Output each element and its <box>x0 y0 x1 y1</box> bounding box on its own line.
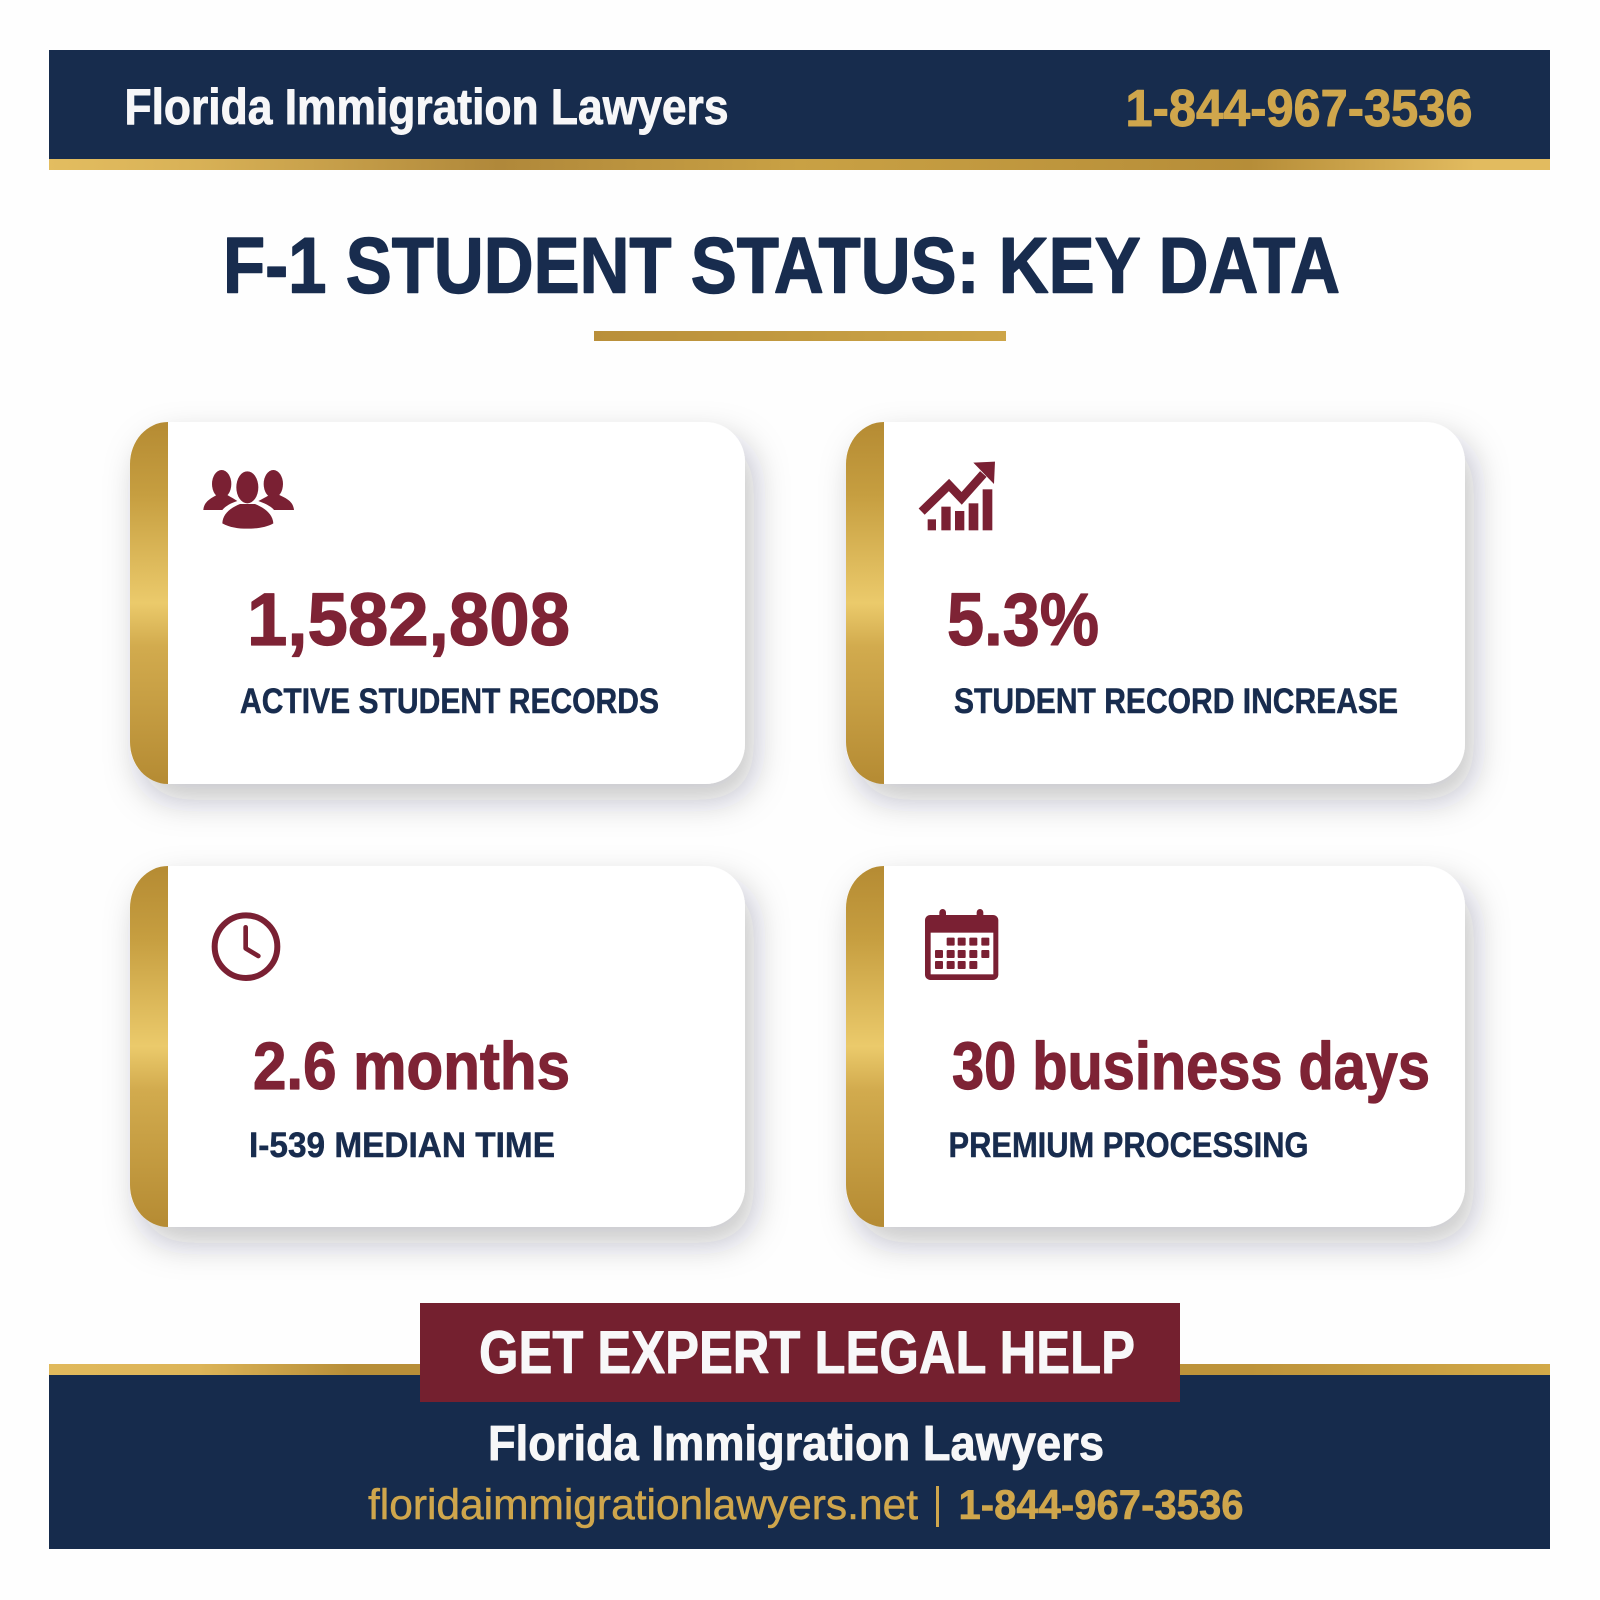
header navy background <box>49 50 1550 159</box>
panel: student record increase <box>846 422 1465 784</box>
panel: active student records <box>130 422 745 784</box>
footer gold rule <box>49 1364 1550 1375</box>
call to action banner <box>420 1303 1180 1402</box>
footer separator <box>936 1486 939 1527</box>
panel: I-539 median time <box>130 866 745 1227</box>
card background <box>130 422 745 784</box>
header phone number: 1-844-967-3536 <box>1126 80 1472 138</box>
banner background <box>420 1303 1180 1402</box>
footer phone number: 1-844-967-3536 <box>958 1481 1244 1528</box>
icon: clock <box>215 915 277 978</box>
header band <box>49 50 1550 170</box>
header firm name: Florida Immigration Lawyers <box>124 79 728 135</box>
card background <box>846 422 1465 784</box>
banner text: GET EXPERT LEGAL HELP <box>479 1319 1135 1386</box>
stat label: I-539 MEDIAN TIME <box>249 1126 555 1165</box>
card background <box>130 866 745 1227</box>
gold side strip <box>846 866 884 1227</box>
icon: rising chart <box>922 462 995 530</box>
icon: group of people <box>203 470 294 529</box>
stat value: 5.3% <box>947 578 1099 661</box>
footer band <box>49 1303 1550 1549</box>
stat label: PREMIUM PROCESSING <box>948 1126 1308 1165</box>
title: F-1 STUDENT STATUS: KEY DATA <box>223 220 1340 310</box>
gold side strip <box>846 422 884 784</box>
stat value: 2.6 months <box>253 1029 570 1104</box>
stat value: 1,582,808 <box>247 578 570 661</box>
stat label: STUDENT RECORD INCREASE <box>954 682 1398 721</box>
icon: calendar <box>925 909 998 980</box>
title underline <box>594 331 1006 341</box>
panel: premium processing <box>846 866 1465 1227</box>
footer firm name: Florida Immigration Lawyers <box>488 1417 1104 1471</box>
gold side strip <box>130 422 168 784</box>
footer navy background <box>49 1375 1550 1549</box>
gold side strip <box>130 866 168 1227</box>
header gold rule <box>49 159 1550 170</box>
card background <box>846 866 1465 1227</box>
stat value: 30 business days <box>952 1029 1430 1104</box>
stat label: ACTIVE STUDENT RECORDS <box>240 682 659 721</box>
footer website: floridaimmigrationlawyers.net <box>368 1481 918 1529</box>
